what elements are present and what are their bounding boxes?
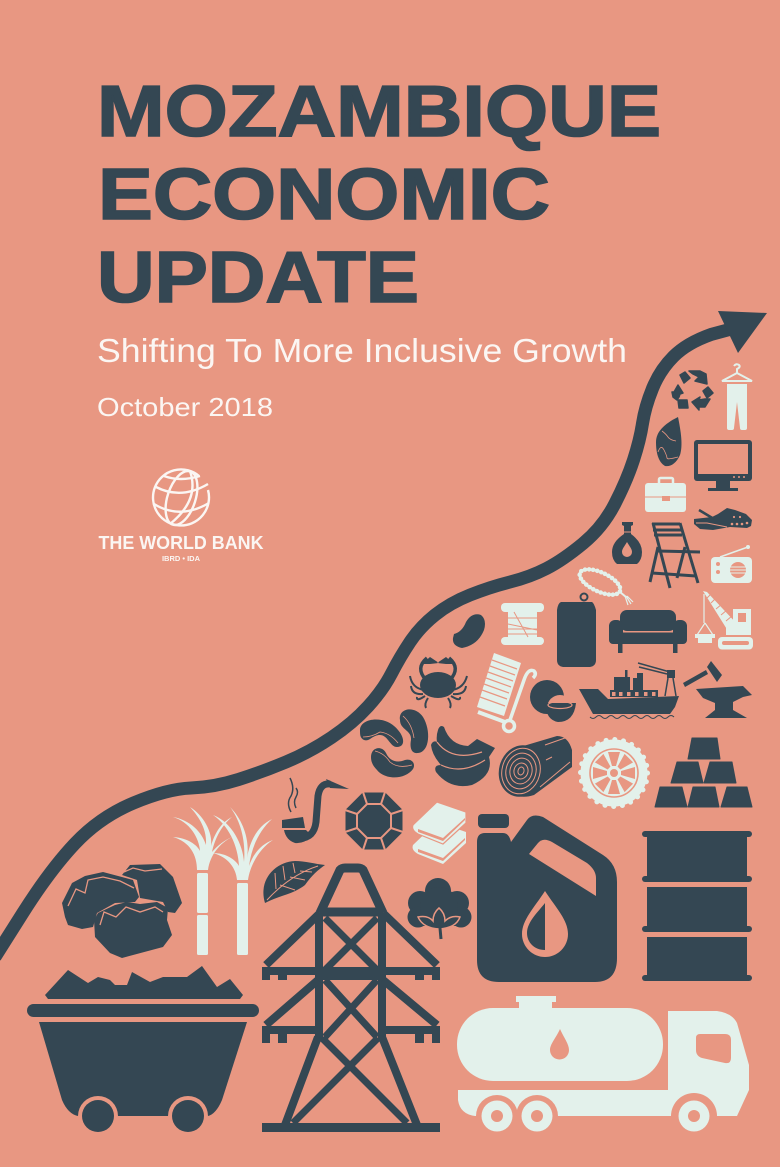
organisation name: THE WORLD BANK — [98, 532, 264, 553]
icon: drink can — [557, 594, 596, 667]
icon: clog shoe — [694, 508, 752, 530]
icon: stack of books — [413, 802, 466, 864]
icon: electricity pylon — [262, 868, 440, 1132]
icon: timber log — [493, 736, 572, 802]
icon: anvil and hammer — [683, 661, 752, 718]
icon: trousers on hanger — [722, 364, 752, 430]
title: MOZAMBIQUE — [97, 72, 661, 152]
icon: sofa — [609, 610, 687, 653]
icon: hand truck — [477, 653, 535, 732]
icon: tobacco pipe — [282, 778, 349, 843]
title — [97, 72, 661, 318]
icon: coal lumps — [62, 864, 182, 958]
icon: tanker truck — [457, 996, 749, 1142]
icon: raw gemstone — [656, 417, 681, 466]
icon: radio — [711, 545, 752, 583]
icon: coconut — [530, 680, 576, 722]
icon: prayer beads — [576, 564, 633, 605]
icon: oil jug — [477, 814, 617, 982]
icon: single bean — [453, 614, 485, 648]
title: ECONOMIC — [98, 155, 550, 235]
title: UPDATE — [97, 238, 419, 318]
icon: mine cart with coal — [27, 966, 259, 1137]
icon: cargo ship — [579, 663, 679, 718]
icon: briefcase — [645, 478, 686, 512]
icon: gemstone — [345, 792, 403, 850]
subtitle: Shifting To More Inclusive Growth — [97, 332, 627, 369]
icon: cotton boll — [408, 878, 472, 939]
icon: cable spool — [501, 603, 544, 645]
icon: recycling symbol — [672, 371, 713, 410]
date: October 2018 — [97, 392, 273, 422]
organisation sub-name: IBRD • IDA — [162, 554, 201, 563]
icon: oil barrels — [642, 831, 752, 981]
icon: gold bars — [655, 738, 752, 807]
icon: bananas — [431, 726, 495, 786]
icon: beans cluster — [360, 709, 428, 777]
icon: television — [694, 440, 752, 491]
icon: crab — [410, 657, 467, 708]
icon: folding chair — [650, 523, 700, 588]
icon: sugarcane — [173, 807, 273, 955]
icon: vase — [612, 522, 642, 564]
World Bank logo — [98, 467, 264, 563]
icon: crawler crane — [695, 591, 753, 650]
icon: globe — [153, 467, 209, 529]
icon: tyre — [580, 740, 648, 806]
growth arrow — [0, 311, 767, 957]
icon: tobacco leaf — [263, 861, 325, 903]
